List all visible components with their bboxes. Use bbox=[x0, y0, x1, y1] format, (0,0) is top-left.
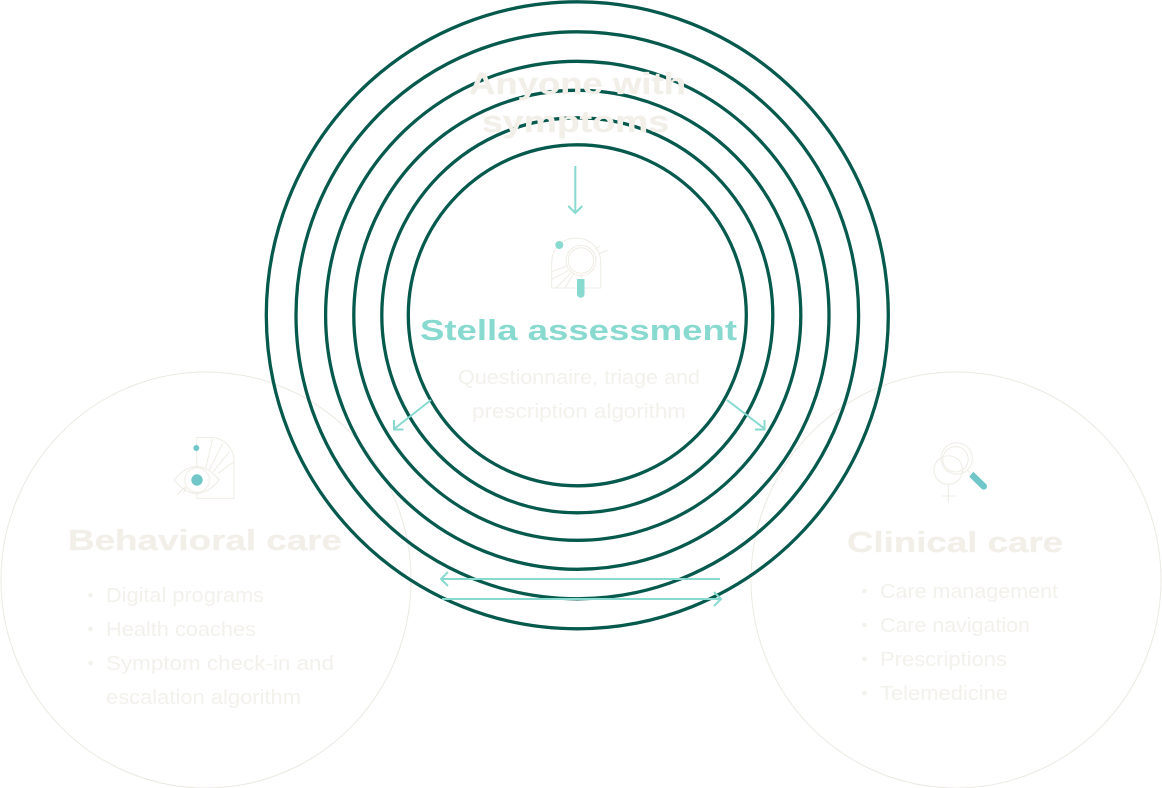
arrow: to clinical care bbox=[727, 400, 765, 430]
list: clinical care: Care management bbox=[880, 580, 1058, 603]
arrow: clinical to behavioral bbox=[441, 572, 720, 586]
heading: behavioral care: Behavioral care bbox=[68, 525, 342, 557]
text: assessment description: Questionnaire, triage and bbox=[458, 366, 700, 389]
heading: anyone with symptoms: symptoms bbox=[482, 104, 669, 139]
list: behavioral care: Health coaches bbox=[106, 618, 256, 641]
icon: magnifier over arch bbox=[552, 238, 608, 298]
concentric rings bbox=[266, 2, 888, 629]
list: behavioral care: escalation algorithm bbox=[106, 686, 301, 709]
list: behavioral care bbox=[88, 584, 334, 709]
heading: anyone with symptoms bbox=[469, 66, 686, 139]
list: behavioral care: Symptom check-in and bbox=[106, 652, 334, 675]
text: assessment description: prescription algorithm bbox=[472, 400, 686, 423]
icon: eye with fan bbox=[174, 438, 234, 498]
arrow: down to assessment bbox=[568, 166, 582, 213]
icon: female symbol with magnifier bbox=[934, 443, 987, 503]
list: clinical care bbox=[862, 580, 1058, 705]
right circle: clinical care bbox=[751, 372, 1161, 788]
left circle: behavioral care bbox=[1, 372, 411, 788]
list: behavioral care: Digital programs bbox=[106, 584, 264, 607]
heading: clinical care: Clinical care bbox=[847, 527, 1063, 559]
text: assessment description bbox=[458, 366, 700, 423]
list: clinical care: Prescriptions bbox=[880, 648, 1007, 671]
heading: stella assessment: Stella assessment bbox=[420, 315, 737, 347]
arrow: behavioral to clinical bbox=[442, 592, 721, 606]
arrow: to behavioral care bbox=[394, 400, 431, 430]
list: clinical care: Telemedicine bbox=[880, 682, 1008, 705]
list: clinical care: Care navigation bbox=[880, 614, 1030, 637]
heading: anyone with symptoms: Anyone with bbox=[469, 66, 686, 101]
